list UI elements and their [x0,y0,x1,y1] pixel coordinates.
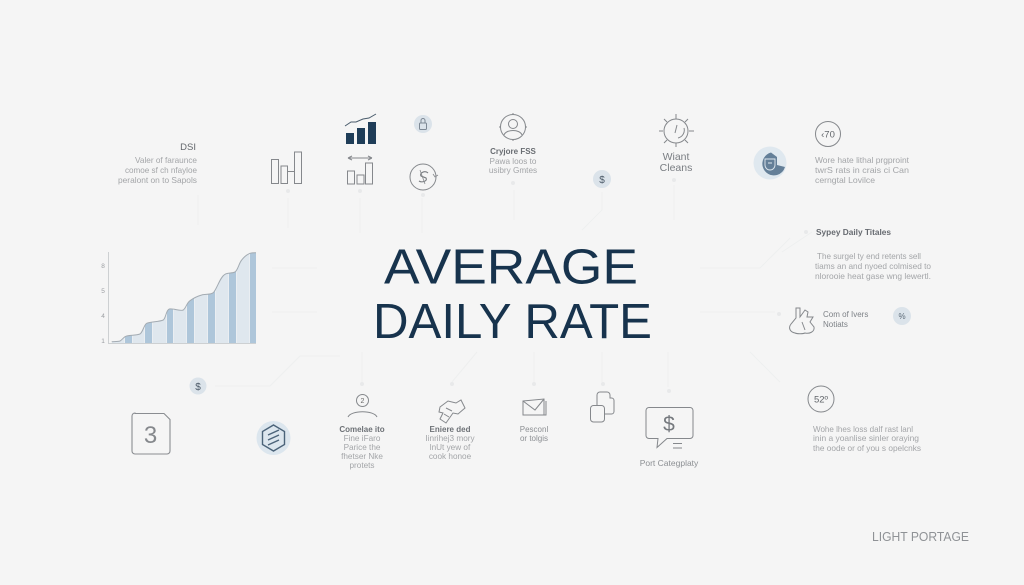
text block: top right description: twrS rats in crais ci Can [815,166,909,175]
icon: overlapping cards [590,382,614,422]
icon: outline bar chart [272,152,302,193]
icon: person with coin [348,382,377,417]
icon: dark bar chart with trend line [345,114,376,144]
text block: DSI: comoe sf ch nfayloe [125,166,197,175]
icon: hands [777,308,814,334]
text block: lower right description: Wohe lhes loss dalf rast lanl [813,425,913,434]
icon: handshake [439,382,465,423]
label: Port Categplaty: Port Categplaty [640,458,699,468]
icon: 70 circle: ‹70 [821,130,835,140]
text block: Comelae ito: Parice the [344,443,381,452]
icon: dollar badge: $ [599,175,605,186]
text block: lower right description: the oode or of you s opelcnks [813,444,921,453]
text block: Cryjore FSS: Cryjore FSS [490,147,537,156]
icon: document with 3 [132,413,170,454]
text block: DSI: Valer of faraunce [135,156,197,165]
text block: lower right description [813,425,921,453]
icon: speech bubble with dollar: $ [663,413,675,436]
text block: Pesconl [520,425,548,443]
icon: lock badge [414,115,432,133]
text block: Eniere ded: lnUt yew of [430,443,471,452]
text block: Sypey Daily Titales: The surgel ty end retents sell [817,252,921,261]
icon: dollar clock [410,164,438,197]
text block: DSI [118,142,197,185]
icon: 70 circle [816,122,840,146]
icon: blue circular badge [754,146,786,180]
icon: envelope [523,382,546,415]
area bar chart: 1 [101,338,105,345]
icon: hexagon badge [256,421,290,455]
text block: Comelae ito: fhetser Nke [341,452,383,461]
icon: person with coin: 2 [361,398,365,405]
text block: Sypey Daily Titales: nlorooie heat gase wng lewertl. [815,272,931,281]
text block: Comelae ito: Fine iFaro [344,434,381,443]
text block: Pesconl: or tolgis [520,434,548,443]
icon: sun gauge [659,114,694,147]
icon: document with 3: 3 [144,422,157,449]
text block: Com of Ivers Notiats: Notiats [823,320,848,329]
text block: Eniere ded: Iinrihej3 mory [425,434,475,443]
icon: small badge right: % [898,312,906,321]
text block: lower right description: inin a yoanlise sinler oraying [813,434,919,443]
icon: small badge right [893,307,911,325]
area bar chart: 4 [101,313,105,320]
icon: dollar badge lower left [190,378,206,394]
area bar chart [101,250,258,345]
text block: Comelae ito: Comelae ito [339,425,385,434]
text block: Pesconl: Pesconl [520,425,548,434]
brand label: LIGHT PORTAGE [872,530,969,544]
text block: Com of Ivers Notiats [823,310,868,329]
title: AVERAGE [384,240,638,294]
text block: Sypey Daily Titales: Sypey Daily Titales [816,227,891,237]
icon: 52 circle [808,386,834,412]
area bar chart: 5 [101,288,105,295]
text block: Comelae ito: protets [349,461,375,470]
title [373,240,652,349]
text block: Com of Ivers Notiats: Com of Ivers [823,310,868,319]
text block: Wiant Cleans [660,151,692,182]
icon: person in gear [499,113,527,141]
text block: Wiant Cleans: Wiant [663,151,690,163]
title: DAILY RATE [373,294,652,349]
text block: Eniere ded: cook honoe [429,452,472,461]
text block: Eniere ded: Eniere ded [430,425,471,434]
icon: 52 circle: 52º [814,394,829,406]
icon: dollar badge [593,170,611,188]
text block: Cryjore FSS: Pawa loos to [490,157,537,166]
icon: dollar badge lower left: $ [195,382,201,393]
text block: Cryjore FSS [489,147,537,185]
text block: Comelae ito [339,425,385,470]
icon: small outline bars with arrow [348,156,372,193]
text block: top right description: Wore hate lithal prgproint [815,156,910,165]
text block: DSI: DSI [180,142,196,153]
text block: Sypey Daily Titales [804,227,931,281]
text block: top right description: cerngtal Lovilce [815,176,875,185]
text block: Sypey Daily Titales: tiams an and nyoed colmised to [815,262,931,271]
area bar chart: 8 [101,263,105,270]
text block: top right description [815,156,910,185]
text block: Cryjore FSS: usibry Gmtes [489,166,537,175]
text block: DSI: peralont on to Sapols [118,176,197,185]
infographic canvas [101,113,968,541]
text block: Eniere ded [425,425,475,461]
icon: speech bubble with dollar [646,389,693,448]
text block: Wiant Cleans: Cleans [660,162,692,174]
